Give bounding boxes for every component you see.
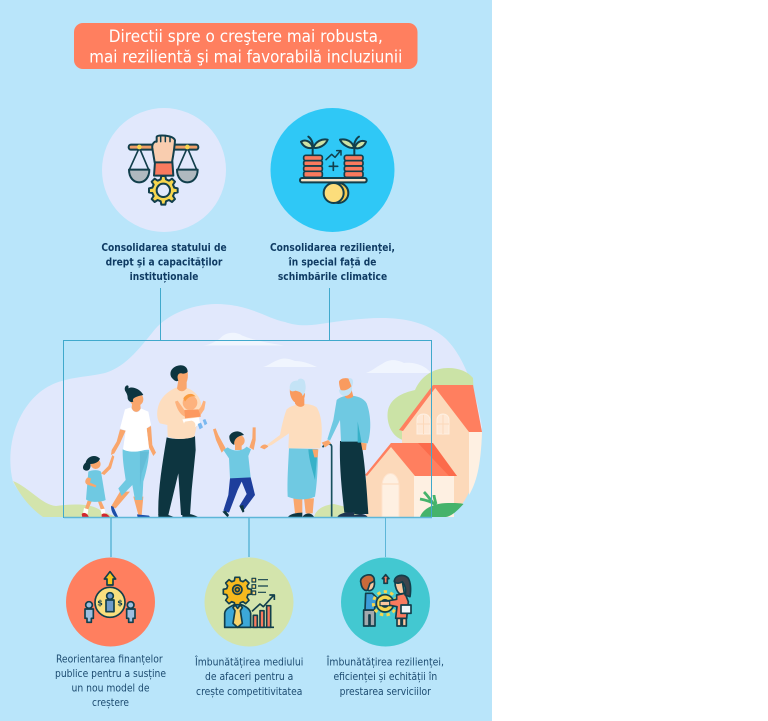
title banner: mai rezilientă şi mai favorabilă incluziunii: [89, 48, 402, 66]
caption: schimbările climatice: [278, 271, 387, 283]
caption: Îmbunătățirea rezilienței,: [326, 656, 444, 668]
icon: plants, coins and balance: [300, 137, 367, 203]
grandfather: [322, 378, 370, 517]
girl: [82, 455, 114, 517]
panel: public finance: [55, 558, 166, 709]
circle: [270, 108, 394, 232]
walking cane: [323, 444, 332, 517]
caption: prestarea serviciilor: [340, 686, 432, 698]
illustration: family and houses: [10, 304, 482, 518]
baby: [175, 394, 207, 429]
caption: un nou model de: [72, 682, 150, 694]
caption: Consolidarea rezilienței,: [270, 242, 395, 254]
lower house: [365, 443, 457, 517]
background panel: [0, 0, 492, 721]
caption: crește competitivitatea: [196, 686, 302, 698]
circle: [204, 558, 294, 646]
icon: businessman and growth chart: [223, 577, 274, 627]
title banner: [74, 23, 418, 69]
title banner: Directii spre o creştere mai robusta,: [109, 27, 383, 46]
green ground right: [314, 504, 358, 517]
tree behind houses: [388, 368, 476, 440]
icon: handshake and gear: [361, 575, 411, 626]
panel: business environment: [194, 558, 303, 698]
panel: climate resilience: [270, 108, 395, 283]
grandmother: [260, 379, 322, 517]
people left group: [82, 365, 207, 518]
caption: [326, 656, 444, 698]
caption: Reorientarea finanțelor: [56, 653, 163, 665]
caption: [194, 656, 303, 698]
caption: de afaceri pentru a: [205, 671, 293, 683]
boy: [213, 427, 256, 517]
caption: Îmbunătățirea mediului: [194, 656, 303, 668]
caption: [270, 242, 395, 283]
caption: eficienței și echității în: [333, 671, 437, 683]
bush: [420, 492, 464, 517]
caption: publice pentru a susține: [55, 668, 166, 680]
bottom connector lines: [64, 518, 432, 557]
caption: [101, 242, 227, 283]
caption: Consolidarea statului de: [101, 242, 227, 254]
caption: creștere: [92, 697, 129, 709]
icon: people and money: $: [97, 599, 103, 608]
upper house: [399, 385, 482, 517]
icon: people and money: $: [117, 599, 123, 608]
circle: [341, 558, 430, 646]
icon: people and money: [85, 572, 135, 622]
circle: [66, 558, 155, 646]
people right group: [213, 378, 370, 517]
panel: rule of law: [101, 108, 227, 283]
caption: drept şi a capacităților: [106, 256, 223, 268]
caption: [55, 653, 166, 709]
background blob: [10, 304, 482, 517]
connector frame and lines: [64, 288, 432, 518]
mother: [111, 385, 156, 518]
circle: [102, 108, 226, 232]
father: [157, 365, 207, 518]
clouds: [202, 333, 284, 346]
caption: instituționale: [130, 271, 198, 283]
panel: public services: [326, 558, 444, 698]
caption: în special față de: [288, 256, 376, 268]
green ground left: [13, 481, 116, 517]
icon: scales, fist and gear: [129, 135, 198, 205]
